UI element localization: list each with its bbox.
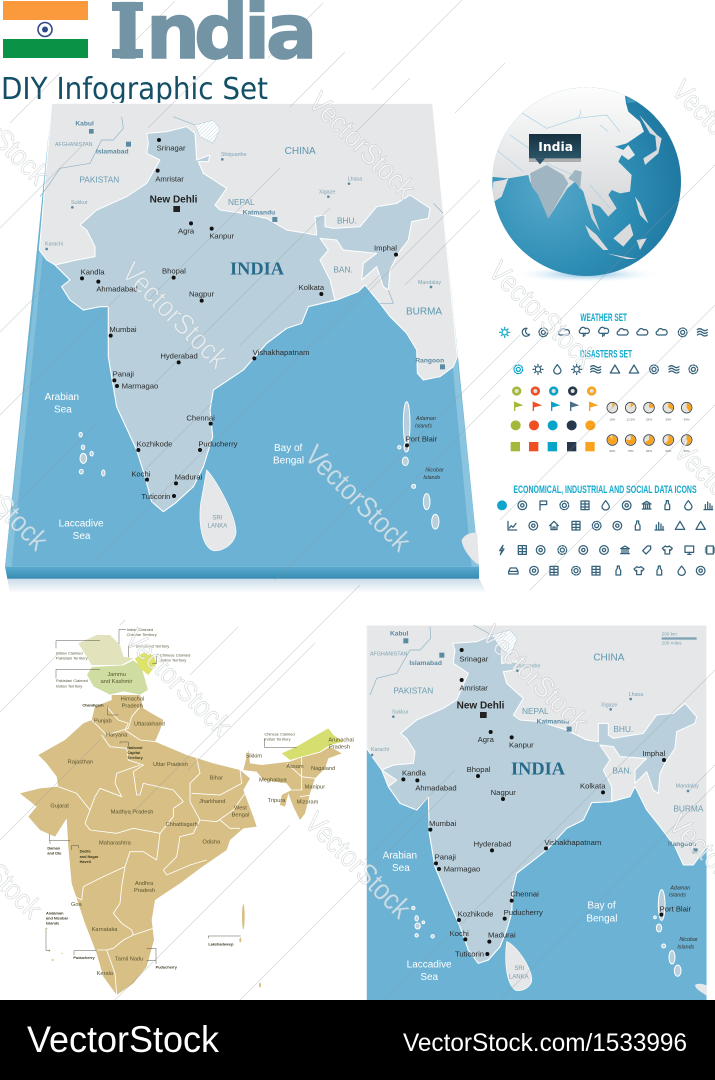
- state labels: Assam: [286, 764, 304, 770]
- map labels: Imphal: [374, 244, 397, 253]
- map labels: Nagpur: [189, 290, 215, 299]
- map labels: PAKISTAN: [393, 686, 433, 696]
- state labels: Chinese Claimed: [160, 652, 190, 657]
- map labels: INDIA: [511, 758, 566, 778]
- map labels: [45, 121, 444, 542]
- map labels: Srinagar: [157, 144, 186, 153]
- state labels: Pradesh: [329, 744, 350, 750]
- leader lines: [46, 629, 297, 964]
- round markers: [511, 420, 595, 430]
- map labels: Chennai: [186, 413, 215, 422]
- state labels: Pradesh: [122, 704, 143, 710]
- watermark: diagonal lines and VectorStock marks: VectorStock: [475, 619, 594, 738]
- neighbouring land: [367, 625, 707, 963]
- foreign capitals and towns: [45, 129, 445, 369]
- map labels: Agra: [178, 226, 195, 235]
- state labels: Mizoram: [297, 800, 319, 806]
- state labels: Chinese Territory: [127, 632, 157, 637]
- map labels: New Dehli: [457, 700, 505, 711]
- state labels: Haveli: [80, 860, 91, 864]
- panel: flat political map of India: [367, 625, 708, 1000]
- state labels: Territory: [127, 756, 144, 760]
- state labels: Pakistani Claimed: [56, 678, 88, 683]
- watermark: diagonal lines and VectorStock marks: VectorStock: [302, 86, 421, 205]
- percentage gauges: 10%: [609, 417, 616, 421]
- disasters icons row: [514, 364, 698, 374]
- map labels: Katmandu: [243, 209, 275, 216]
- north-east states: [243, 747, 342, 820]
- map labels: Bhopal: [467, 765, 491, 774]
- state labels: Gujarat: [50, 804, 69, 810]
- state labels: and Nicobar: [46, 917, 69, 921]
- economic icons row 3: [500, 545, 715, 555]
- country borders: [370, 625, 492, 695]
- map labels: CHINA: [593, 653, 625, 664]
- map flags: [514, 401, 598, 411]
- map labels: New Dehli: [150, 195, 198, 206]
- state labels: Chhattisgarh: [166, 822, 198, 828]
- Asia landmass: [487, 82, 644, 232]
- state labels: Jharkhand: [199, 799, 225, 805]
- India shape: [382, 635, 697, 963]
- panel: icon sets: [498, 312, 715, 575]
- map labels: Kabul: [390, 631, 409, 638]
- economic icons row 4: [509, 566, 705, 575]
- state labels: Chandigarh: [82, 704, 104, 708]
- state labels: Karnataka: [92, 927, 118, 933]
- state labels: Haryana: [106, 733, 128, 739]
- percentage gauges: [607, 402, 692, 453]
- state labels: Goa: [71, 902, 83, 908]
- foreign capitals and towns: [371, 638, 698, 853]
- state labels: Indian Claimed: [56, 650, 83, 655]
- state labels: West: [234, 806, 247, 812]
- map labels: Bhopal: [162, 266, 186, 275]
- watermark: diagonal lines and VectorStock marks: VectorStock: [482, 255, 601, 374]
- map labels: Nagpur: [491, 788, 516, 797]
- state labels: Meghalaya: [259, 778, 288, 784]
- heading: weather set: WEATHER SET: [580, 312, 627, 324]
- percentage gauges: 66%: [646, 449, 652, 453]
- economic icons row 2: [508, 521, 705, 530]
- map labels: Puducherry: [198, 440, 238, 449]
- weather icons row: [500, 327, 707, 337]
- map labels: Mumbai: [109, 325, 137, 334]
- Jammu and Kashmir: [87, 660, 148, 695]
- map labels: PAKISTAN: [79, 175, 119, 185]
- percentage gauges: 50%: [684, 449, 690, 453]
- map labels: Xigaze: [319, 190, 335, 196]
- Chinese claimed territory: [135, 653, 157, 675]
- map labels: Sukkur: [71, 200, 88, 206]
- map labels: Amristar: [459, 684, 488, 693]
- map labels: BURMA: [406, 306, 442, 317]
- percentage gauges: 75%: [628, 449, 634, 453]
- percentage gauges: 25%: [646, 417, 652, 421]
- percentage gauges: 90%: [609, 449, 616, 453]
- state labels: Indian Claimed: [127, 627, 153, 632]
- map labels: Chennai: [510, 890, 539, 899]
- map labels: Hyderabad: [474, 840, 511, 849]
- state labels: Puducherry: [156, 965, 178, 969]
- map labels: Laccadive: [59, 519, 104, 530]
- state labels: Bengal: [232, 813, 249, 819]
- map labels: Panaji: [435, 853, 456, 862]
- watermark: diagonal lines and VectorStock marks: VectorStock: [298, 806, 417, 925]
- map tag: India: India: [538, 140, 573, 154]
- map labels: Nicobar: [425, 467, 444, 473]
- map tag: India: [529, 134, 581, 164]
- state labels: Islands: [46, 922, 59, 926]
- Indian claimed Pakistani territory: [78, 635, 133, 665]
- neighbouring land: [39, 103, 457, 512]
- map labels: Kochi: [450, 929, 469, 938]
- state labels: Indian Territory: [56, 683, 82, 688]
- map labels: SRI: [212, 515, 223, 521]
- map labels: Kandla: [81, 268, 105, 277]
- map labels: Puducherry: [504, 908, 543, 917]
- heading: disasters set: DISASTERS SET: [580, 349, 632, 361]
- map labels: Lhasa: [348, 176, 362, 182]
- state labels: Tamil Nadu: [115, 957, 143, 963]
- Sri Lanka: [506, 942, 532, 991]
- state labels: Arunachal: [328, 737, 354, 743]
- state labels: Tripura: [268, 798, 286, 804]
- state labels: Madhya Pradesh: [111, 810, 153, 816]
- map labels: Arabian: [45, 392, 79, 403]
- scale bar: [662, 631, 697, 645]
- map labels: Bengal: [586, 913, 617, 924]
- map labels: Arabian: [383, 850, 417, 861]
- map labels: Ahmadabad: [415, 783, 457, 792]
- map labels: Katmandu: [537, 718, 569, 725]
- city markers: [80, 138, 409, 498]
- India shape: [55, 127, 430, 512]
- state labels: Pakistani Territory: [56, 655, 88, 660]
- map labels: Kolkata: [299, 283, 325, 292]
- globe centred on India: [487, 82, 681, 283]
- main India states shape: [20, 695, 257, 995]
- percentage gauges: 60%: [665, 449, 672, 453]
- state labels: Kerala: [97, 971, 114, 977]
- map labels: Tuticorin: [141, 492, 170, 501]
- map labels: Kabul: [75, 121, 94, 128]
- state labels: Andaman: [46, 911, 64, 915]
- country borders: [40, 117, 443, 303]
- state labels: Nagaland: [311, 766, 335, 772]
- map labels: Mumbai: [429, 819, 457, 828]
- map labels: NEPAL: [228, 197, 255, 207]
- state labels: and Nagar: [80, 855, 99, 859]
- map labels: Panaji: [113, 370, 134, 379]
- map labels: Islamabad: [96, 149, 129, 156]
- map pins: [513, 388, 595, 394]
- map labels: Vishakhapatnam: [253, 348, 310, 357]
- state labels: Punjab: [94, 719, 112, 725]
- scale bar: 200 miles: [662, 640, 682, 645]
- state labels: Indian Territory: [160, 657, 186, 662]
- panel: administrative map of Indian states: [20, 627, 354, 995]
- state labels: Dadra: [80, 849, 91, 853]
- disputed hatched territory: [195, 120, 220, 143]
- state labels: [46, 627, 354, 977]
- disputed hatched territory: [492, 630, 517, 655]
- map labels: LANKA: [208, 524, 227, 530]
- map labels: Kanpur: [509, 740, 534, 749]
- map labels: Imphal: [642, 749, 666, 758]
- map labels: Kolkata: [580, 781, 606, 790]
- map labels: Sea: [392, 863, 410, 874]
- map labels: Rangoon: [415, 357, 444, 364]
- map labels: Port Blair: [660, 904, 692, 913]
- map labels: Kochi: [131, 469, 151, 478]
- map labels: BURMA: [673, 804, 704, 814]
- map labels: Karachi: [45, 241, 63, 247]
- state labels: Capital: [127, 751, 140, 755]
- map labels: Shiquanhe: [221, 152, 247, 158]
- state labels: and Kashmir: [101, 679, 133, 685]
- Sumatra tip: [462, 533, 479, 565]
- map labels: Sea: [420, 972, 439, 983]
- state labels: Uttarakhand: [134, 721, 165, 727]
- map labels: Ahmadabad: [96, 284, 138, 293]
- map labels: Adaman: [669, 885, 690, 891]
- map labels: Islands: [415, 423, 432, 429]
- map labels: Islands: [669, 893, 686, 899]
- state labels: Puducherry: [73, 956, 95, 960]
- map labels: BHU.: [337, 216, 357, 226]
- map labels: LANKA: [509, 974, 529, 980]
- footer brand: VectorStock: [27, 1019, 219, 1060]
- city markers: [401, 648, 666, 956]
- watermark: diagonal lines and VectorStock marks: VectorStock: [298, 439, 417, 558]
- islands: [79, 402, 439, 529]
- map labels: [370, 631, 704, 983]
- map labels: Tuticorin: [455, 950, 484, 959]
- map labels: Bengal: [273, 455, 304, 466]
- map labels: Xigaze: [601, 702, 617, 708]
- map labels: Agra: [478, 735, 495, 744]
- state labels: and Diu: [47, 852, 62, 856]
- map labels: Marmagao: [122, 382, 158, 391]
- map labels: SRI: [514, 966, 525, 972]
- map labels: AFGHANISTAN: [370, 652, 408, 658]
- state labels: Chinese Claimed: [264, 731, 295, 736]
- map labels: Bay of: [274, 443, 303, 454]
- header: flag of India: [3, 1, 88, 58]
- map labels: Port Blair: [406, 435, 438, 444]
- Arunachal Pradesh: [282, 728, 343, 760]
- state labels: Manipur: [305, 784, 325, 790]
- percentage gauges: 40%: [684, 417, 690, 421]
- map labels: BAN.: [333, 265, 353, 275]
- state labels: National: [127, 746, 142, 750]
- state labels: Himachal: [121, 696, 144, 702]
- map labels: Sukkur: [392, 709, 409, 715]
- state labels: Bihar: [210, 776, 223, 782]
- map labels: AFGHANISTAN: [55, 142, 93, 148]
- map labels: Islamabad: [409, 660, 442, 667]
- map labels: BAN.: [612, 765, 632, 775]
- map labels: Adaman: [415, 416, 436, 422]
- map labels: Rangoon: [668, 841, 697, 848]
- map labels: Nicobar: [679, 937, 698, 943]
- Sri Lanka: [200, 470, 236, 551]
- state labels: Maharashtra: [99, 841, 132, 847]
- map labels: Hyderabad: [160, 351, 198, 360]
- map labels: Amristar: [155, 174, 184, 183]
- map labels: BHU.: [613, 724, 633, 734]
- footer image URL text: VectorStock.com/1533996: [403, 1029, 687, 1057]
- watermark: diagonal lines and VectorStock marks: VectorStock: [115, 256, 234, 375]
- state labels: Daman: [47, 847, 61, 851]
- footer bar: [0, 1000, 715, 1080]
- map labels: Kandla: [402, 769, 427, 778]
- map labels: Bay of: [587, 901, 616, 912]
- state labels: Lakshadweep: [208, 942, 234, 946]
- map labels: Mandalay: [676, 784, 699, 790]
- watermark: diagonal lines and VectorStock marks: VectorStock: [118, 623, 237, 742]
- subtitle: DIY Infographic Set: DIY Infographic Set: [1, 72, 268, 107]
- map labels: Kozhikode: [137, 439, 172, 448]
- map labels: Lhasa: [629, 692, 643, 698]
- Sumatra tip: [695, 984, 706, 996]
- scale bar: 200 km: [662, 631, 677, 636]
- map labels: Mandalay: [418, 280, 441, 286]
- map labels: INDIA: [230, 258, 285, 278]
- state labels: Jammu: [107, 672, 126, 678]
- map labels: Islands: [423, 475, 441, 481]
- state labels: Sikkim: [245, 753, 262, 759]
- percentage gauges: 33%: [665, 417, 672, 421]
- state labels: Undefined Territory: [136, 643, 169, 648]
- map labels: Sea: [54, 405, 72, 416]
- map labels: Srinagar: [459, 654, 489, 663]
- map labels: Vishakhapatnam: [544, 838, 601, 847]
- square markers: [511, 442, 595, 451]
- islands: [46, 904, 261, 987]
- economic icons row 1: [498, 501, 713, 510]
- state labels: Uttar Pradesh: [153, 762, 188, 768]
- map labels: CHINA: [285, 146, 316, 157]
- state labels: Andhra: [135, 881, 154, 887]
- state labels: Odisha: [202, 840, 221, 846]
- map labels: Kanpur: [209, 232, 234, 241]
- state labels: Rajasthan: [68, 759, 93, 765]
- percentage gauges: 12.5%: [626, 417, 635, 421]
- map labels: Madurai: [175, 473, 203, 482]
- map labels: Laccadive: [407, 959, 452, 970]
- map labels: Marmagao: [444, 865, 480, 874]
- map labels: NEPAL: [522, 706, 549, 716]
- state borders: [58, 707, 315, 995]
- panel: 3D perspective map of India: [5, 103, 487, 593]
- map labels: Karachi: [371, 747, 389, 753]
- islands: [412, 890, 681, 976]
- state labels: Pradesh: [134, 888, 155, 894]
- map labels: Sea: [73, 531, 91, 542]
- map labels: Kozhikode: [458, 909, 493, 918]
- map labels: Islands: [677, 945, 695, 951]
- map labels: Madurai: [488, 931, 516, 940]
- state labels: Indian Territory: [264, 736, 291, 741]
- map labels: Shiquanhe: [515, 664, 541, 670]
